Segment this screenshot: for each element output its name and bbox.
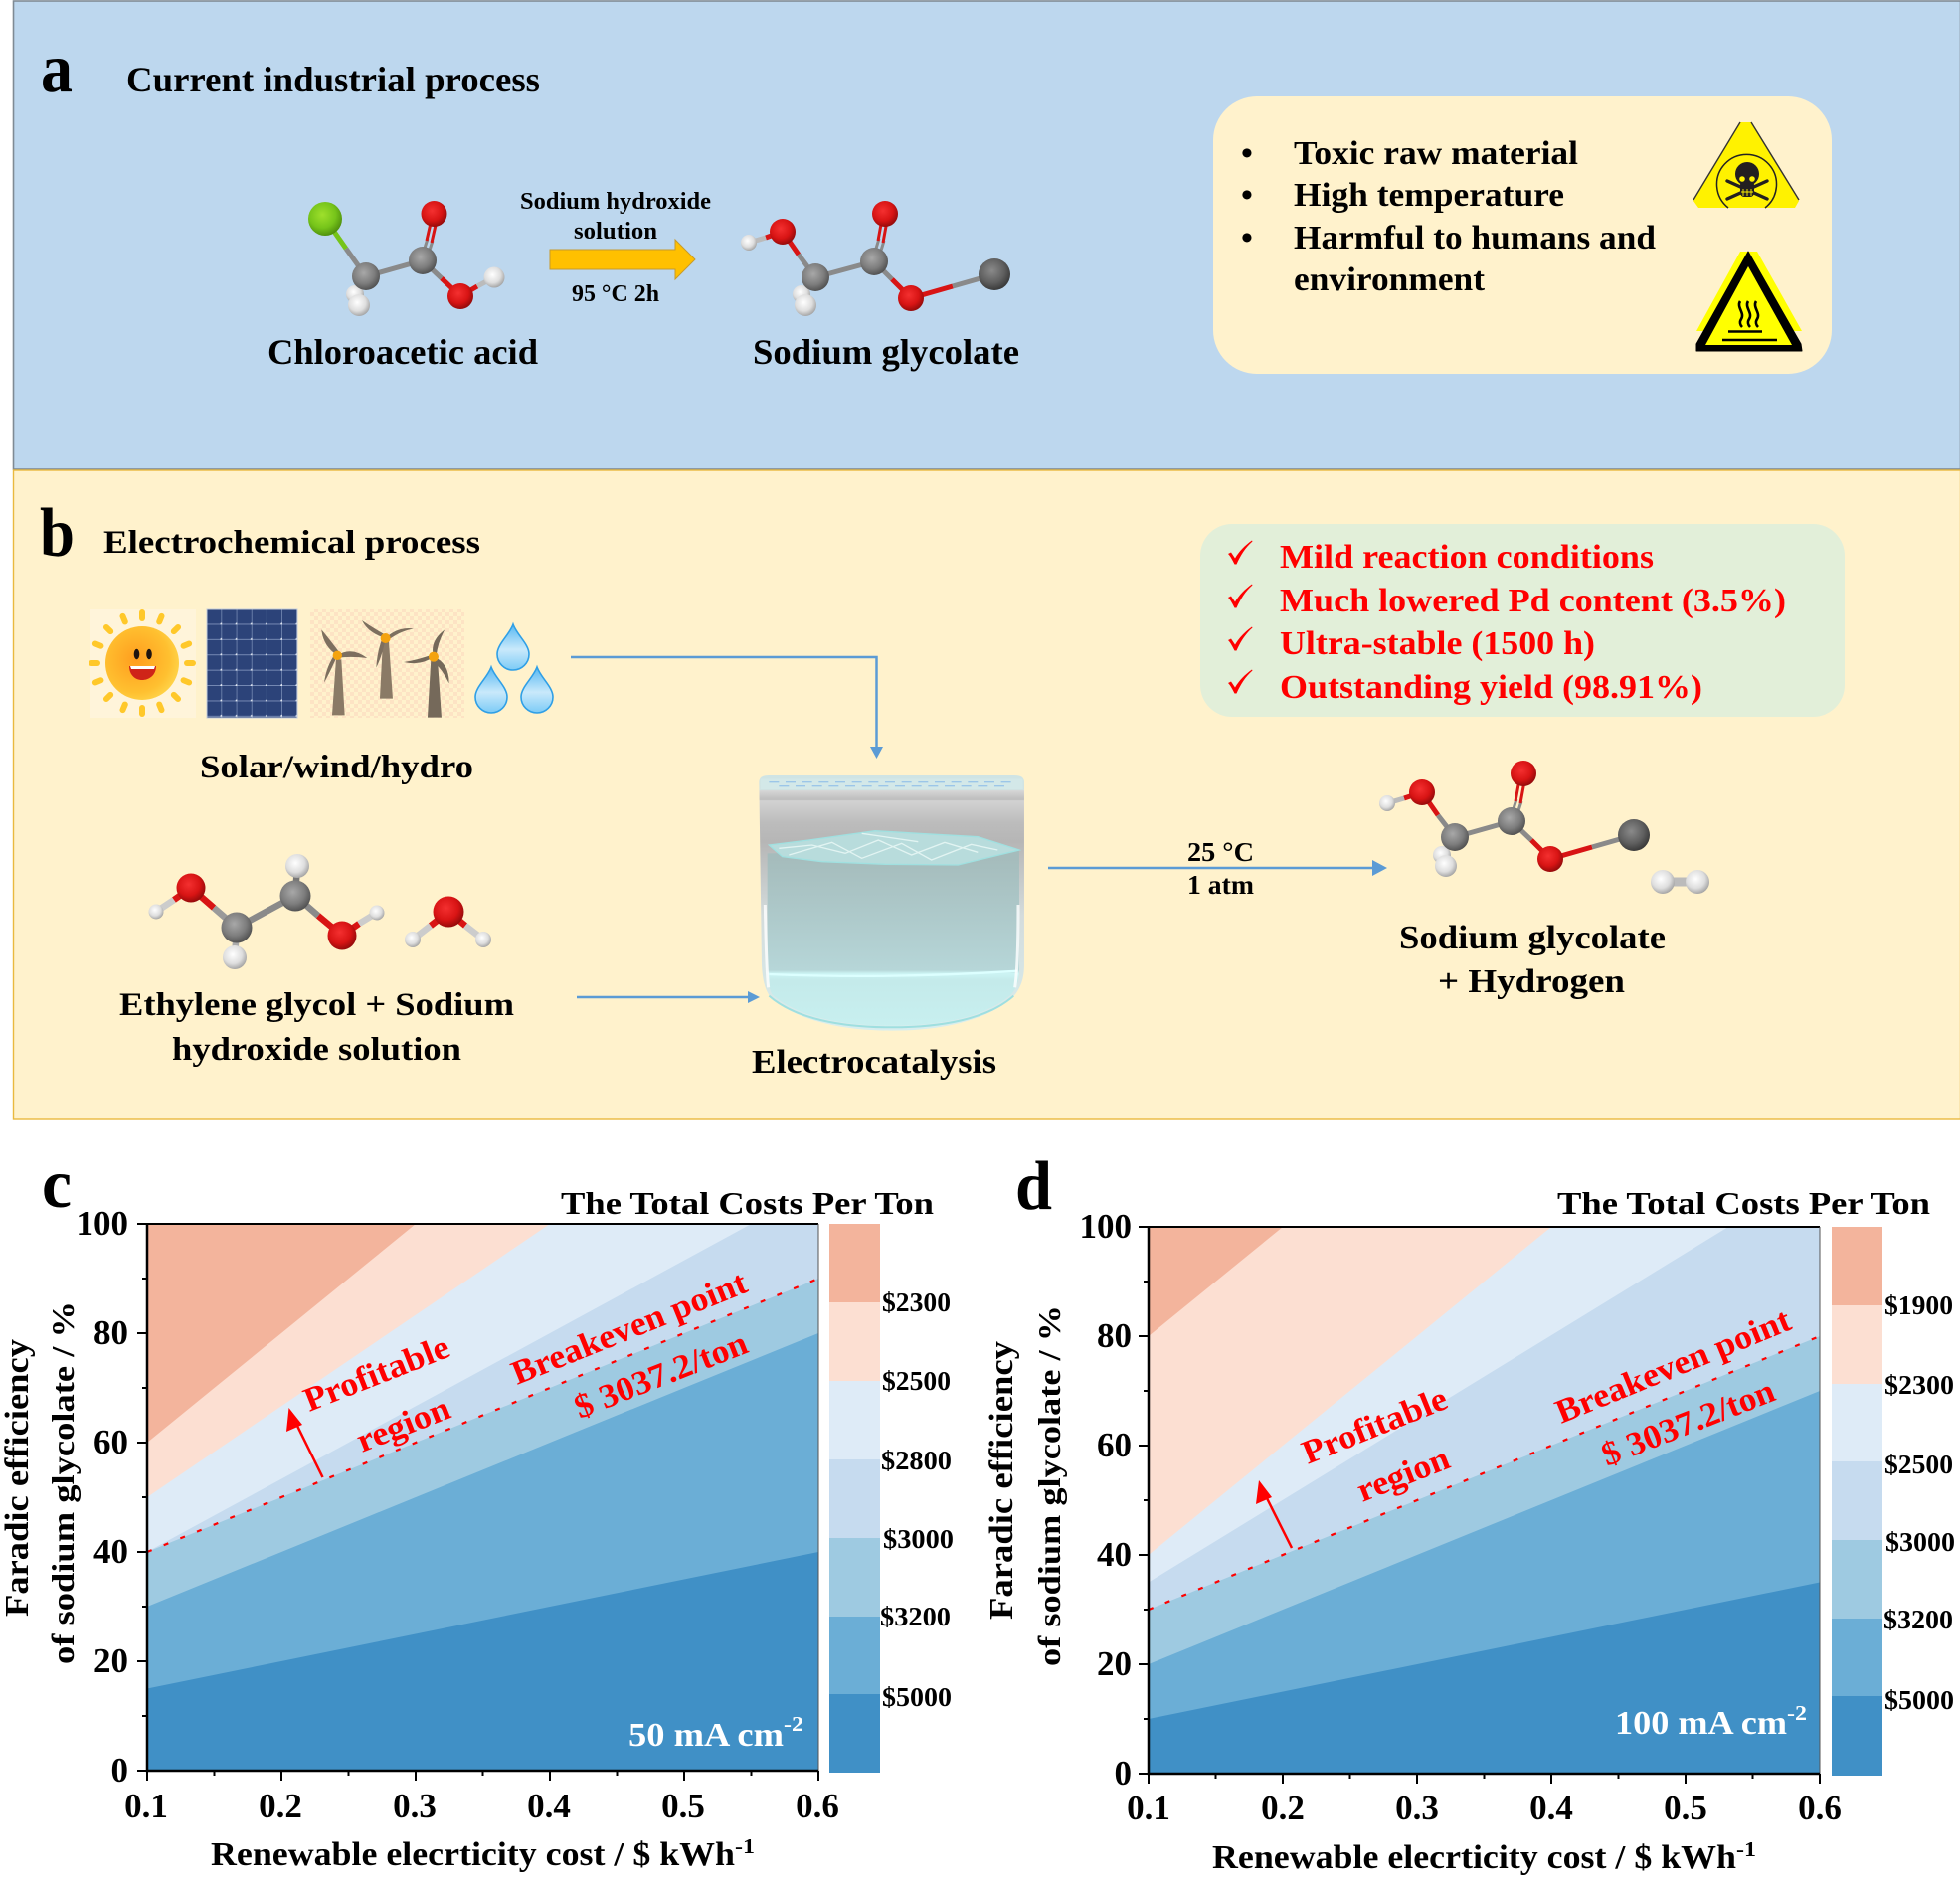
axes <box>137 1223 818 1781</box>
y axis title <box>983 1305 1067 1666</box>
annotation: breakeven point: $ 3037.2/ton <box>1596 1373 1780 1473</box>
y axis tick labels <box>76 1204 128 1790</box>
current density label: -2 <box>784 1712 803 1736</box>
callout: drawbacks <box>1213 96 1832 374</box>
colorbar labels: $1900 <box>1884 1290 1953 1320</box>
y axis tick labels <box>1080 1207 1132 1793</box>
arrow: profitable direction <box>1256 1480 1292 1548</box>
heading: current industrial process: Current industrial process <box>126 60 540 99</box>
advantages list: Outstanding yield (98.91%) <box>1280 669 1702 706</box>
panel b: electrochemical process <box>14 470 1960 1119</box>
annotation: breakeven point: $ 3037.2/ton <box>569 1325 753 1426</box>
x axis title: -1 <box>735 1834 755 1858</box>
label: ethylene glycol and sodium hydroxide solution: hydroxide solution <box>172 1032 461 1068</box>
x axis tick labels: 0.6 <box>796 1787 839 1825</box>
colorbar labels: $2300 <box>882 1287 951 1317</box>
panel d: cost contour at 100 mA cm-2 <box>983 1148 1955 1876</box>
colorbar labels: $3200 <box>1883 1605 1953 1634</box>
current density label: -2 <box>1787 1701 1807 1725</box>
x axis title: Renewable elecrticity cost / $ kWh <box>1212 1839 1736 1876</box>
arrow: reagents to cell <box>577 991 760 1003</box>
colorbar <box>1832 1227 1955 1776</box>
reaction condition: sodium hydroxide solution <box>520 189 711 245</box>
x axis tick labels: 0.1 <box>124 1787 168 1825</box>
contour plot <box>147 1224 818 1771</box>
bullet list: • <box>1241 135 1253 172</box>
advantages list: Mild reaction conditions <box>1280 539 1654 576</box>
panel label d: d <box>1015 1148 1052 1225</box>
panel a: current industrial process <box>14 1 1960 469</box>
y axis title <box>0 1301 81 1664</box>
bullet list: Toxic raw material <box>1294 135 1578 172</box>
annotation: profitable region <box>1297 1380 1455 1509</box>
colorbar labels <box>880 1287 954 1712</box>
colorbar title: The Total Costs Per Ton <box>1557 1185 1930 1221</box>
bullet list: • <box>1241 220 1253 256</box>
advantages list: Ultra-stable (1500 h) <box>1280 625 1595 662</box>
y axis tick labels: 40 <box>93 1532 128 1571</box>
label: sodium glycolate plus hydrogen: Sodium glycolate <box>1399 920 1666 956</box>
arrow: profitable direction <box>286 1408 322 1477</box>
reaction conditions: temperature and pressure <box>1187 837 1255 900</box>
label: electrocatalysis: Electrocatalysis <box>752 1044 996 1081</box>
bullet list <box>1241 135 1656 298</box>
label: sodium glycolate plus hydrogen <box>1399 920 1666 1000</box>
arrow: cell to products <box>1048 860 1387 876</box>
x axis title: -1 <box>1736 1837 1756 1861</box>
reaction condition: sodium hydroxide solution: Sodium hydroxide <box>520 189 711 215</box>
colorbar labels <box>1883 1290 1955 1715</box>
heading: electrochemical process: Electrochemical process <box>103 525 480 561</box>
x axis title: Renewable elecrticity cost / $ kWh <box>211 1836 735 1873</box>
reaction condition: temperature and time: 95 °C 2h <box>572 281 659 307</box>
annotation: breakeven point: Breakeven point <box>506 1264 753 1392</box>
axes <box>1139 1226 1820 1784</box>
y axis tick labels: 0 <box>111 1751 128 1790</box>
reaction condition: sodium hydroxide solution: solution <box>574 219 657 245</box>
annotation: profitable region: Profitable <box>298 1329 454 1419</box>
label: sodium glycolate plus hydrogen: + Hydrogen <box>1438 963 1625 1000</box>
reaction conditions: temperature and pressure: 25 °C <box>1187 837 1254 867</box>
y axis tick labels: 0 <box>1114 1754 1132 1793</box>
x axis tick labels <box>124 1787 839 1825</box>
annotation: breakeven point <box>1550 1301 1797 1473</box>
x axis tick labels: 0.4 <box>527 1787 571 1825</box>
icon: toxic hazard <box>1693 122 1799 208</box>
colorbar labels: $5000 <box>882 1682 952 1712</box>
label: ethylene glycol and sodium hydroxide solution: Ethylene glycol + Sodium <box>119 987 514 1023</box>
annotation: profitable region <box>298 1329 455 1459</box>
y axis tick labels: 20 <box>93 1641 128 1680</box>
panel label a: a <box>41 31 73 107</box>
annotation: profitable region: Profitable <box>1297 1380 1453 1471</box>
x axis tick labels: 0.4 <box>1529 1789 1573 1827</box>
molecule: sodium glycolate <box>741 201 1010 316</box>
icon: water drops <box>475 624 553 713</box>
arrow: reaction direction <box>550 240 695 279</box>
icon: electrolysis beaker <box>759 775 1024 1031</box>
panel label c: c <box>42 1146 72 1223</box>
breakeven line <box>147 1279 818 1552</box>
colorbar labels: $3000 <box>1885 1527 1955 1557</box>
current density label: 100 mA cm <box>1615 1705 1787 1742</box>
colorbar labels: $3200 <box>880 1602 951 1631</box>
reaction conditions: temperature and pressure: 1 atm <box>1187 870 1255 900</box>
molecule: chloroacetic acid <box>308 201 505 316</box>
breakeven line <box>1149 1336 1820 1610</box>
advantages list: Much lowered Pd content (3.5%) <box>1280 583 1786 619</box>
x axis tick labels: 0.2 <box>1261 1789 1305 1827</box>
x axis tick labels: 0.6 <box>1798 1789 1842 1827</box>
current density label: 50 mA cm <box>628 1717 784 1754</box>
x axis tick labels: 0.1 <box>1127 1789 1170 1827</box>
y axis tick labels: 60 <box>1097 1426 1132 1464</box>
annotation: breakeven point: Breakeven point <box>1550 1301 1797 1431</box>
annotation: profitable region: region <box>1351 1440 1455 1509</box>
y axis title: of sodium glycolate / % <box>1031 1305 1067 1666</box>
colorbar labels: $2800 <box>881 1446 952 1475</box>
panel c: cost contour at 50 mA cm-2 <box>0 1146 954 1873</box>
label: sodium glycolate: Sodium glycolate <box>753 332 1019 372</box>
bullet list: High temperature <box>1294 177 1564 214</box>
molecules: sodium glycolate and hydrogen <box>1379 761 1709 894</box>
y axis tick labels: 20 <box>1097 1644 1132 1683</box>
x axis tick labels: 0.3 <box>1395 1789 1439 1827</box>
y axis tick labels: 80 <box>93 1313 128 1352</box>
x axis tick labels <box>1127 1789 1842 1827</box>
icon: solar panel <box>207 609 297 718</box>
y axis title: of sodium glycolate / % <box>45 1301 81 1664</box>
colorbar labels: $2300 <box>1884 1370 1954 1400</box>
colorbar labels: $2500 <box>882 1366 951 1396</box>
icon: high temperature hazard <box>1696 252 1802 351</box>
y axis tick labels: 60 <box>93 1423 128 1461</box>
label: solar wind hydro: Solar/wind/hydro <box>200 750 473 785</box>
label: ethylene glycol and sodium hydroxide solution <box>119 987 514 1068</box>
contour plot <box>1149 1227 1820 1774</box>
colorbar labels: $5000 <box>1884 1685 1954 1715</box>
y axis title: Faradic efficiency <box>983 1341 1020 1620</box>
y axis tick labels: 80 <box>1097 1316 1132 1355</box>
icon: sun <box>89 609 196 718</box>
x axis tick labels: 0.5 <box>661 1787 705 1825</box>
x axis tick labels: 0.5 <box>1664 1789 1707 1827</box>
checkmarks <box>1228 541 1253 694</box>
molecules: ethylene glycol and water <box>149 854 491 969</box>
y axis tick labels: 100 <box>76 1204 128 1243</box>
x axis tick labels: 0.3 <box>393 1787 437 1825</box>
callout: advantages <box>1200 524 1845 717</box>
bullet list: environment <box>1294 261 1486 298</box>
y axis tick labels: 40 <box>1097 1535 1132 1574</box>
annotation: profitable region: region <box>351 1390 455 1459</box>
bullet list: • <box>1241 177 1253 214</box>
colorbar labels: $2500 <box>1884 1450 1953 1479</box>
arrow: energy input to cell <box>571 657 883 759</box>
panel label b: b <box>40 495 75 572</box>
bullet list: Harmful to humans and <box>1294 220 1656 256</box>
advantages list <box>1280 539 1786 706</box>
colorbar title: The Total Costs Per Ton <box>561 1185 934 1221</box>
colorbar labels: $3000 <box>883 1524 954 1554</box>
label: chloroacetic acid: Chloroacetic acid <box>267 332 538 372</box>
x axis tick labels: 0.2 <box>259 1787 302 1825</box>
y axis tick labels: 100 <box>1080 1207 1132 1246</box>
y axis title: Faradic efficiency <box>0 1339 36 1617</box>
colorbar <box>829 1224 954 1773</box>
icon: wind turbines <box>310 609 464 718</box>
